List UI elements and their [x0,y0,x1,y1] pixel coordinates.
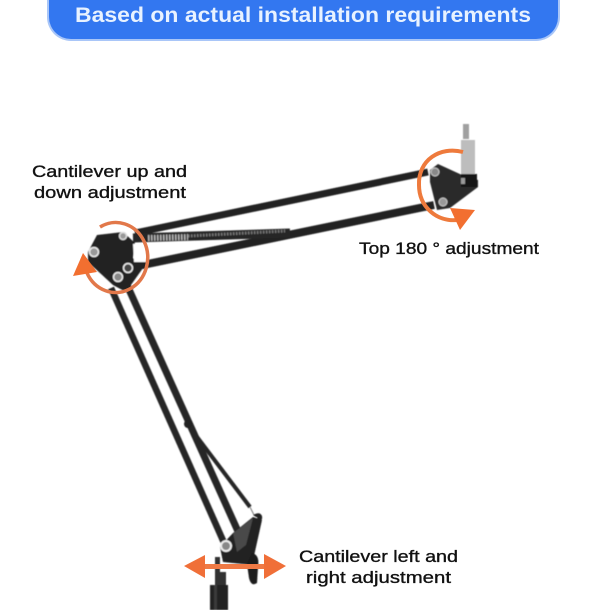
elbow joint plate [88,232,148,292]
label: cantilever up and down [32,162,187,202]
label: cantilever left and right: right adjustment [306,568,451,587]
tension spring [133,231,290,238]
head plate and mic screw [430,124,478,210]
label: cantilever up and down: Cantilever up and [32,162,187,181]
swivel double arrow [184,554,286,579]
label: cantilever left and right: Cantilever left and [299,547,458,566]
elbow rotation arrow [73,223,148,293]
upper arm bars [128,172,434,268]
head rotation arrow [419,151,475,230]
lower arm bars [111,285,254,545]
label: cantilever up and down: down adjustment [34,183,186,202]
label: top 180 adjustment: Top 180 ° adjustment [359,239,539,258]
label: cantilever left and right [299,547,458,587]
base bracket and pole [210,513,262,610]
microphone boom arm [88,124,478,610]
header banner [47,0,560,41]
header banner: Based on actual installation requirements [75,3,531,27]
